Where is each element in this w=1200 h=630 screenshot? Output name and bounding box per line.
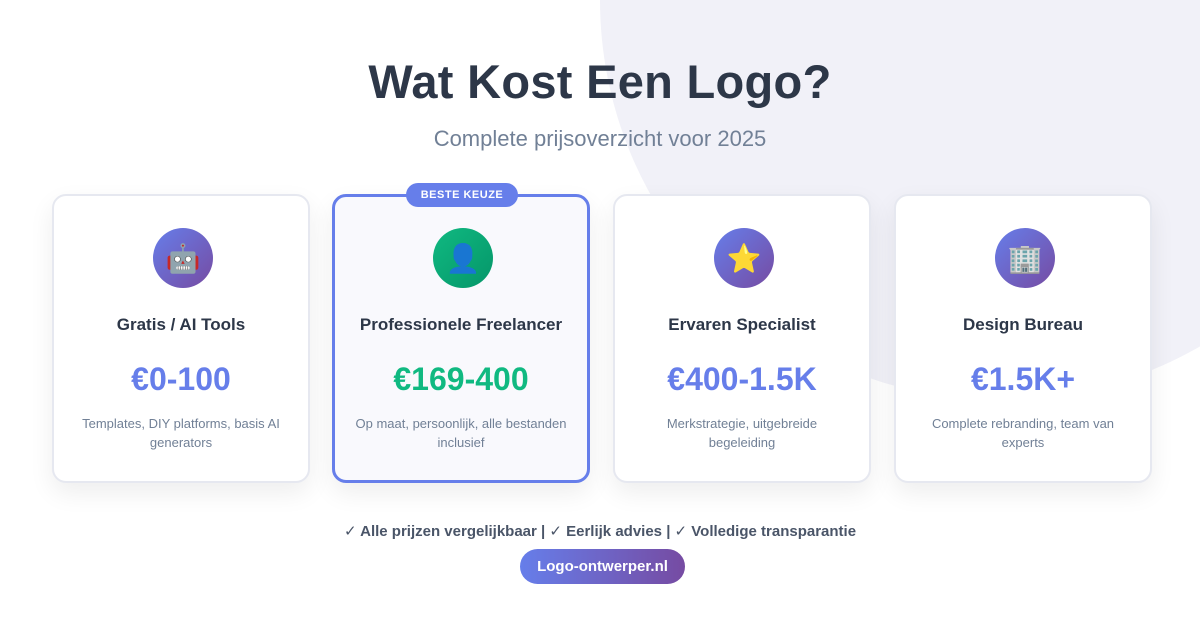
button <box>520 549 685 584</box>
panel: specialist <box>613 194 871 483</box>
description: Complete rebranding, team van experts <box>932 416 1114 450</box>
icon: star <box>714 228 774 288</box>
subtitle: Complete prijsoverzicht voor 2025 <box>434 126 766 151</box>
heading: Gratis / AI Tools <box>117 315 245 334</box>
price: €0-100 <box>131 361 231 397</box>
icon: building <box>995 228 1055 288</box>
icon: star: ⭐ <box>727 242 761 274</box>
badge <box>406 183 518 207</box>
panel: freelancer <box>332 194 590 483</box>
icon: robot <box>153 228 213 288</box>
title: Wat Kost Een Logo? <box>368 55 832 108</box>
button: Logo-ontwerper.nl <box>537 558 668 575</box>
footer text: ✓ Alle prijzen vergelijkbaar | ✓ Eerlijk advies | ✓ Volledige transparantie <box>344 523 856 540</box>
icon: building: 🏢 <box>1008 242 1042 274</box>
price: €169-400 <box>393 361 529 397</box>
heading: Professionele Freelancer <box>360 315 562 334</box>
icon: robot: 🤖 <box>166 242 200 274</box>
description: Op maat, persoonlijk, alle bestanden inclusief <box>355 416 566 450</box>
icon: person: 👤 <box>446 242 480 274</box>
price: €1.5K+ <box>971 361 1075 397</box>
heading: Design Bureau <box>963 315 1083 334</box>
description: Merkstrategie, uitgebreide begeleiding <box>667 416 817 450</box>
icon: person <box>433 228 493 288</box>
panel: bureau <box>894 194 1152 483</box>
description: Templates, DIY platforms, basis AI generators <box>82 416 280 450</box>
badge: BESTE KEUZE <box>421 189 503 201</box>
panel: gratis <box>52 194 310 483</box>
price: €400-1.5K <box>667 361 817 397</box>
heading: Ervaren Specialist <box>668 315 816 334</box>
